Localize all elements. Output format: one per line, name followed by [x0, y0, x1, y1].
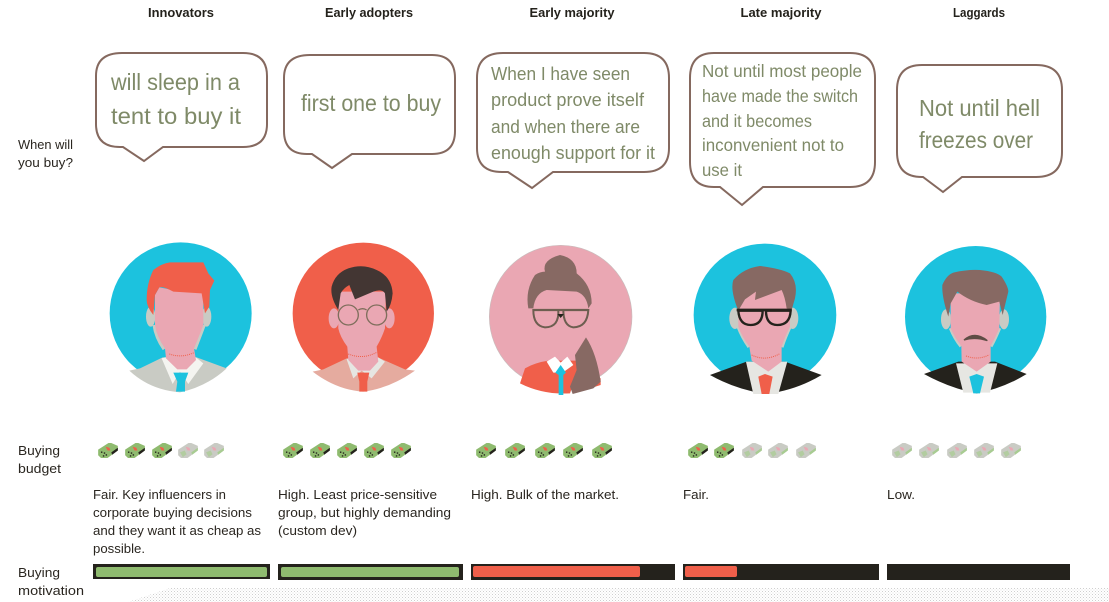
speech bubble: late majority: and it becomes: [702, 111, 812, 131]
speech bubble: late majority: [690, 53, 875, 205]
motivation bar: late majority: [683, 564, 879, 580]
motivation bar: laggards: [887, 564, 1070, 580]
budget text: innovators: and they want it as cheap as: [93, 523, 262, 538]
label: buying motivation: Buying: [18, 565, 60, 580]
budget text: innovators: corporate buying decisions: [93, 505, 253, 520]
column headings: Early adopters: [325, 6, 413, 20]
label: buying motivation: motivation: [18, 583, 84, 598]
speech bubble: early adopters: first one to buy: [301, 90, 441, 116]
speech bubble: early adopters: [284, 55, 455, 168]
avatar: late majority: [694, 244, 836, 394]
speech bubble: early majority: and when there are: [491, 116, 640, 137]
speech bubble: late majority: have made the switch: [702, 86, 858, 106]
budget icons: laggards: [892, 443, 1021, 458]
budget text: early adopters: High. Least price-sensitive: [278, 487, 437, 502]
budget icons: early adopters: [283, 443, 411, 458]
speech bubble: late majority: use it: [702, 160, 742, 180]
column headings: Early majority: [530, 6, 615, 20]
speech bubble: early majority: [477, 53, 669, 188]
speech bubble: laggards: [897, 65, 1062, 192]
budget text: early adopters: [278, 487, 451, 538]
budget text: early majority: High. Bulk of the market.: [471, 487, 619, 502]
speech bubble: early majority: enough support for it: [491, 142, 655, 163]
avatar: early adopter: [293, 243, 434, 392]
column headings: Innovators: [148, 6, 214, 20]
label: when will you buy: When will: [18, 137, 73, 152]
speech bubble: innovators: tent to buy it: [111, 103, 242, 129]
avatar: early majority: [489, 245, 632, 395]
column headings: [148, 6, 1005, 20]
budget icons: early majority: [476, 443, 612, 458]
label: buying budget: Buying: [18, 443, 60, 458]
speech bubble: laggards: freezes over: [919, 127, 1033, 153]
budget icons: late majority: [688, 443, 816, 458]
label: when will you buy: you buy?: [18, 155, 73, 170]
speech bubble: late majority: Not until most people: [702, 61, 862, 81]
label: buying motivation: [18, 565, 84, 598]
label: when will you buy: [18, 137, 73, 170]
speech bubble: innovators: [96, 53, 267, 161]
budget text: early adopters: group, but highly demanding: [278, 505, 451, 520]
budget text: laggards: Low.: [887, 487, 915, 502]
budget text: innovators: [93, 487, 262, 556]
avatar: laggard: [905, 246, 1046, 393]
speech bubble: innovators: will sleep in a: [110, 69, 240, 95]
speech bubble: early majority: product prove itself: [491, 89, 645, 110]
budget text: innovators: possible.: [93, 541, 145, 556]
speech bubble: early majority: When I have seen: [491, 63, 630, 84]
speech bubble: laggards: Not until hell: [919, 95, 1040, 121]
budget icons: innovators: [98, 443, 224, 458]
motivation bar: early adopters: [278, 564, 463, 580]
label: buying budget: [18, 443, 61, 476]
budget text: late majority: Fair.: [683, 487, 709, 502]
budget text: innovators: Fair. Key influencers in: [93, 487, 226, 502]
speech bubble: late majority: inconvenient not to: [702, 135, 844, 155]
budget text: early adopters: (custom dev): [278, 523, 357, 538]
motivation bar: innovators: [93, 564, 270, 579]
motivation bar: early majority: [471, 564, 675, 580]
avatar: innovator: [110, 242, 252, 392]
column headings: Laggards: [953, 6, 1005, 20]
column headings: Late majority: [740, 6, 822, 20]
label: buying budget: budget: [18, 461, 61, 476]
